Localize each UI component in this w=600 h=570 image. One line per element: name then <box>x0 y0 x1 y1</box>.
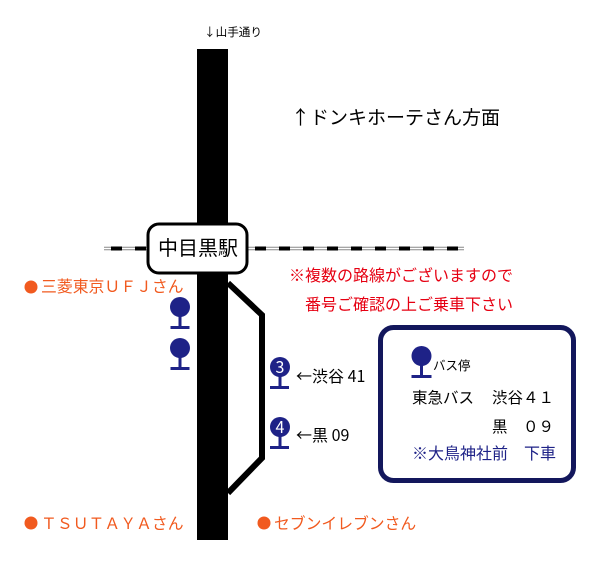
legend line: Kuro 09 <box>492 415 554 437</box>
direction label: Don Quijote: ↑ドンキホーテさん方面 <box>291 103 500 130</box>
icon: legend bus stop <box>412 346 432 378</box>
red notice: ※複数の路線がございますので <box>289 262 513 286</box>
icon: bus stop 3: 3 <box>276 354 284 378</box>
legend line: get off <box>412 440 556 464</box>
legend title: バス停 <box>433 355 471 374</box>
landmark: MUFG: 三菱東京ＵＦＪさん <box>41 274 184 297</box>
label: Shibuya 41: ←渋谷 41 <box>296 363 365 387</box>
side road <box>228 283 262 493</box>
icon: bus stop 3 <box>270 354 290 389</box>
landmark: TSUTAYA: ＴＳＵＴＡＹＡさん <box>41 511 184 534</box>
legend line: get off: ※大鳥神社前 <box>412 440 508 464</box>
red notice: 番号ご確認の上ご乗車下さい <box>305 291 513 315</box>
legend line: Tokyu bus Shibuya 41: 渋谷４１ <box>492 386 554 408</box>
railway line <box>104 247 464 250</box>
road: Yamate-dori vertical <box>197 49 228 540</box>
icon: bus stop left lower <box>170 338 190 370</box>
legend line: Tokyu bus Shibuya 41 <box>412 386 554 408</box>
landmark: Seven-Eleven: セブンイレブンさん <box>274 511 416 534</box>
label: Kuro 09: ←黒 09 <box>296 422 349 446</box>
legend line: Kuro 09: ０９ <box>523 415 554 437</box>
road label: Yamate-dori: ↓山手通り <box>204 24 262 40</box>
station label: Nakameguro <box>148 224 247 273</box>
station label: Nakameguro: 中目黒駅 <box>158 232 238 261</box>
icon: bus stop left upper <box>170 297 190 329</box>
legend line: Tokyu bus Shibuya 41: 東急バス <box>412 386 474 408</box>
panel: bus legend <box>380 328 574 480</box>
red notice <box>289 262 513 315</box>
legend line: Kuro 09: 黒 <box>492 415 508 437</box>
legend line: get off: 下車 <box>524 440 556 464</box>
icon: bus stop 4: 4 <box>276 414 285 438</box>
icon: bus stop 4 <box>270 414 290 449</box>
